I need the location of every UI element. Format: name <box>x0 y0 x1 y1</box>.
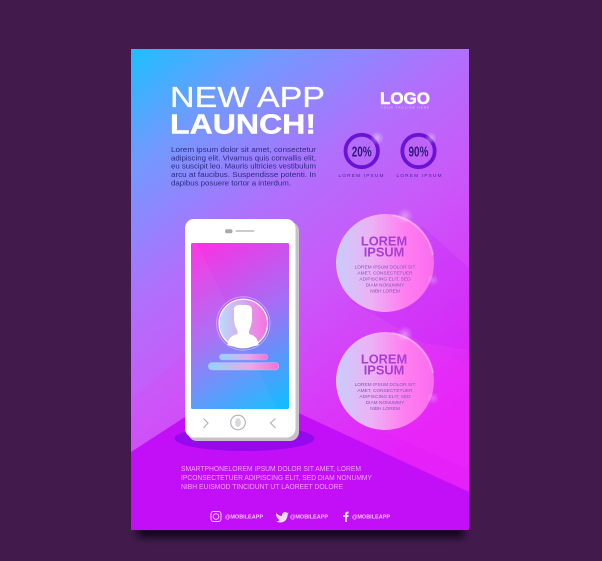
bubble 1: LOREM IPSUM DOLOR SIT <box>355 264 415 270</box>
footer text <box>181 466 372 491</box>
footer text: IPCONSECTETUER ADIPISCING ELIT, SED DIAM NONUMMY <box>181 475 372 482</box>
logo: LOGO <box>380 89 430 108</box>
icon: twitter <box>276 512 288 522</box>
bubble 2 <box>336 326 439 430</box>
intro paragraph: adipiscing elit. Vivamus quis convallis elit, <box>171 154 316 162</box>
social links: @MOBILEAPP <box>290 514 328 520</box>
bubble 2: AMET, CONSECTETUER <box>357 388 413 394</box>
logo: YOUR TAGLINE HERE <box>381 106 429 110</box>
bubble 1: DIAM NONUMMY <box>366 282 405 288</box>
bubble 2: LOREM IPSUM DOLOR SIT <box>355 382 415 388</box>
stat: 20%: LOREM IPSUM <box>338 173 384 179</box>
phone floor shadow <box>174 426 314 451</box>
footer text: SMARTPHONELOREM IPSUM DOLOR SIT AMET, LOREM <box>181 466 361 473</box>
bubble 2: NIBH LOREM <box>370 406 400 412</box>
icon: facebook <box>343 512 348 522</box>
intro paragraph: arcu at faucibus. Suspendisse potenti. In <box>171 170 316 179</box>
footer text: NIBH EUISMOD TINCIDUNT UT LAOREET DOLORE <box>181 484 343 491</box>
phone body <box>185 219 296 438</box>
bubble 2: DIAM NONUMMY <box>366 400 405 406</box>
stat: 90% <box>396 132 442 179</box>
phone <box>174 219 314 451</box>
poster background <box>131 49 469 530</box>
phone side <box>188 222 299 441</box>
icon: instagram <box>211 512 221 522</box>
title: NEW APP <box>170 82 325 114</box>
avatar <box>217 297 270 350</box>
bubble 1: NIBH LOREM <box>370 288 400 294</box>
bubble 1: ADIPISCING ELIT, SED <box>359 276 411 282</box>
bubble 1: IPSUM <box>364 245 404 260</box>
stat: 20% <box>338 131 384 179</box>
stat: 90%: 90% <box>408 144 428 160</box>
social links: @MOBILEAPP <box>225 514 263 520</box>
social links: @MOBILEAPP <box>352 514 390 520</box>
bubble 1: LOREM <box>361 234 407 249</box>
bubble 1: AMET, CONSECTETUER <box>357 270 413 276</box>
bubble 2: IPSUM <box>364 362 404 378</box>
stat: 90%: LOREM IPSUM <box>396 173 442 179</box>
speaker <box>225 229 254 233</box>
intro paragraph: Lorem ipsum dolor sit amet, consectetur <box>171 145 317 154</box>
bubble 2: ADIPISCING ELIT, SED <box>359 394 411 400</box>
title: LAUNCH! <box>170 108 316 140</box>
bubble 1 <box>336 208 439 312</box>
social links <box>211 512 390 522</box>
poster drop shadow <box>138 526 464 537</box>
bubble 2: LOREM <box>361 352 407 367</box>
stat: 20%: 20% <box>352 144 372 160</box>
intro paragraph: dapibus posuere tortor a interdum. <box>171 178 291 188</box>
nav buttons <box>204 415 276 430</box>
title <box>170 82 325 140</box>
intro paragraph: eu suscipit leo. Mauris ultricies vestibulum <box>171 162 316 170</box>
phone screen <box>191 243 289 409</box>
intro paragraph <box>171 145 317 188</box>
name bars <box>208 354 279 370</box>
